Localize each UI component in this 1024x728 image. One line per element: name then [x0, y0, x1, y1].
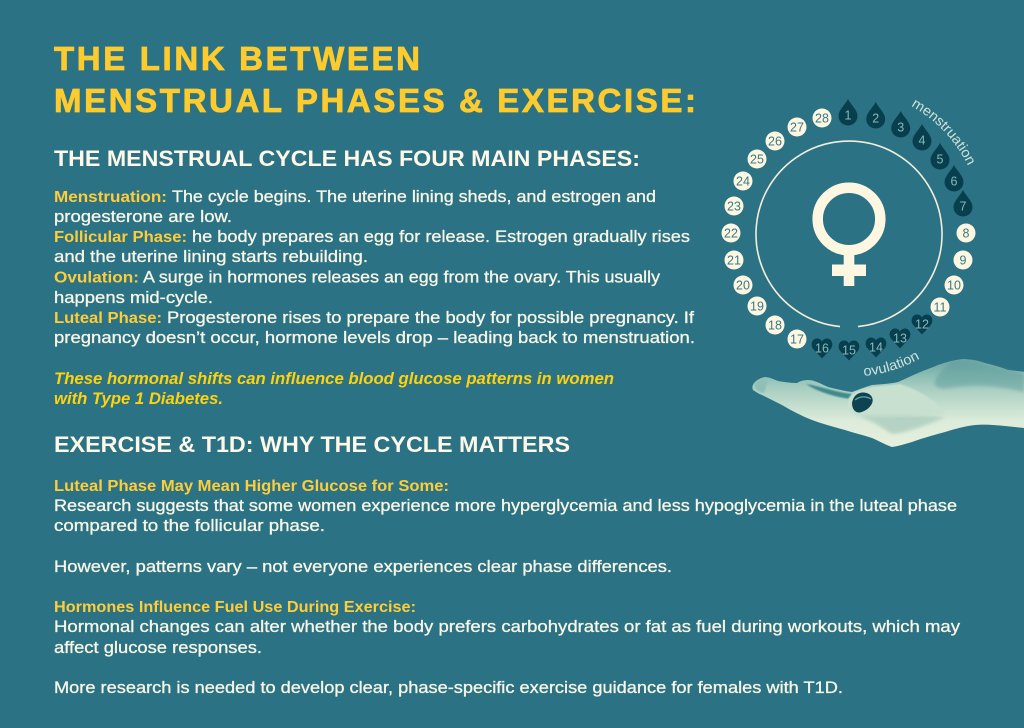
text block: phases — [54, 188, 695, 347]
ovulation days — [812, 314, 932, 360]
ovulation days: 13 — [893, 332, 907, 346]
icon: open hand — [752, 359, 1024, 447]
text block: luteal phase glucose — [54, 478, 957, 576]
luteal days: 18 — [768, 318, 782, 332]
ovulation days: 12 — [915, 318, 929, 332]
heading: four main phases: THE MENSTRUAL CYCLE HAS FOUR MAIN PHASES: — [54, 146, 640, 171]
text block: fuel use: More research is needed to develop clear, phase-specific exercise guidance for females with T1D. — [54, 679, 843, 697]
inner ring — [756, 141, 942, 327]
text block: phases: happens mid-cycle. — [54, 289, 213, 307]
luteal days: 20 — [736, 278, 750, 292]
text block: luteal phase glucose: Research suggests that some women experience more hyperglycemia and less hypoglycemia in the luteal phase — [54, 497, 957, 515]
ovulation days: 16 — [815, 342, 829, 356]
text block: fuel use: affect glucose responses. — [54, 639, 262, 657]
luteal days: 24 — [736, 174, 750, 188]
icon: venus symbol — [818, 188, 880, 286]
menstruation days — [838, 99, 972, 216]
title: THE LINK BETWEEN — [54, 40, 420, 77]
luteal days: 17 — [790, 332, 804, 346]
finger crease — [806, 384, 852, 399]
menstruation days: 1 — [845, 108, 852, 122]
text block: luteal phase glucose: compared to the follicular phase. — [54, 517, 325, 535]
text block: phases: Progesterone rises to prepare the body for possible pregnancy. If — [167, 309, 694, 327]
text block: phases: A surge in hormones releases an egg from the ovary. This usually — [143, 268, 661, 286]
text block: phases: progesterone are low. — [54, 208, 232, 226]
text block: phases: he body prepares an egg for release. Estrogen gradually rises — [192, 228, 690, 246]
title — [54, 40, 696, 119]
luteal days: 26 — [768, 134, 782, 148]
callout: hormonal shifts: with Type 1 Diabetes. — [54, 390, 223, 408]
luteal days: 21 — [727, 254, 741, 268]
menstruation days: 4 — [919, 134, 926, 148]
text block: luteal phase glucose: However, patterns vary – not everyone experiences clear phase differences. — [54, 558, 672, 576]
luteal days: 22 — [724, 226, 738, 240]
thumb underside crease — [858, 416, 945, 434]
luteal days: 28 — [815, 112, 829, 126]
ovulation days: 14 — [869, 340, 883, 354]
text block: phases: The cycle begins. The uterine lining sheds, and estrogen and — [172, 188, 656, 206]
text block: phases: pregnancy doesn’t occur, hormone levels drop – leading back to menstruation. — [54, 329, 695, 347]
menstruation days: 7 — [960, 200, 967, 214]
text block: phases: Menstruation: — [54, 189, 167, 206]
thumb — [848, 384, 945, 417]
luteal days: 27 — [790, 120, 804, 134]
text block: fuel use — [54, 599, 961, 697]
text block: fuel use: Hormones Influence Fuel Use During Exercise: — [54, 599, 416, 616]
ovulation days: 15 — [842, 344, 856, 358]
follicular days: 11 — [934, 300, 947, 314]
menstruation days: 3 — [897, 120, 904, 134]
text block: phases: and the uterine lining starts rebuilding. — [54, 248, 368, 266]
chart: cycle wheel — [722, 99, 976, 376]
thumb nail — [852, 392, 873, 413]
heading: exercise and T1D: EXERCISE & T1D: WHY THE CYCLE MATTERS — [54, 432, 570, 457]
luteal days: 19 — [750, 300, 764, 314]
fingertip nail edge — [755, 381, 768, 393]
luteal days: 23 — [727, 200, 741, 214]
follicular days: 9 — [960, 254, 967, 268]
label: menstruation: menstruation — [912, 100, 974, 166]
callout: hormonal shifts: These hormonal shifts can influence blood glucose patterns in women — [54, 370, 614, 388]
menstruation days: 2 — [872, 112, 879, 126]
upper hand shadow — [935, 362, 1024, 392]
menstruation days: 6 — [951, 174, 958, 188]
text block: phases: Luteal Phase: — [54, 310, 162, 327]
text block: fuel use: Hormonal changes can alter whether the body prefers carbohydrates or fat as fuel during workouts, which may — [54, 618, 961, 636]
text block: luteal phase glucose: Luteal Phase May Mean Higher Glucose for Some: — [54, 478, 449, 495]
text block: phases: Ovulation: — [54, 270, 139, 286]
follicular days: 8 — [963, 226, 970, 240]
luteal days — [722, 108, 832, 348]
follicular days — [930, 224, 976, 316]
luteal days: 25 — [750, 152, 764, 166]
title: MENSTRUAL PHASES & EXERCISE: — [54, 82, 696, 119]
menstruation days: 5 — [937, 152, 944, 166]
follicular days: 10 — [947, 278, 961, 292]
label: ovulation: ovulation — [864, 353, 920, 376]
callout: hormonal shifts — [54, 370, 614, 408]
text block: phases: Follicular Phase: — [54, 229, 187, 246]
